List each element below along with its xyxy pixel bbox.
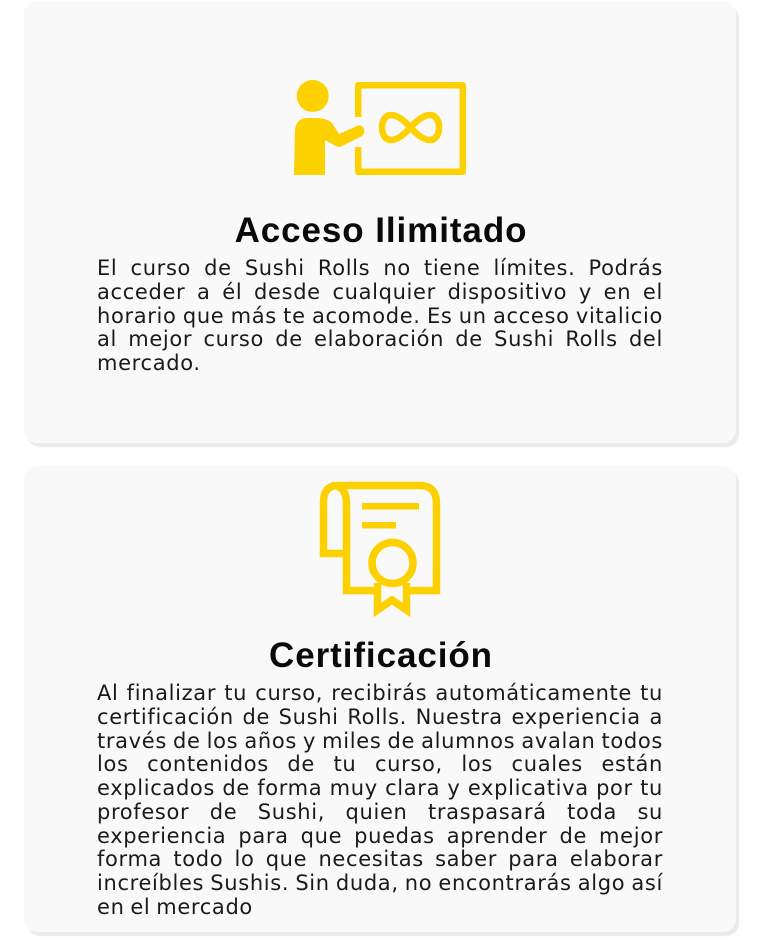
- text block: acceso ilimitado: [97, 256, 663, 375]
- text block: certificación: en el mercado: [97, 895, 253, 919]
- text block: acceso ilimitado: al mejor curso de elaboración de Sushi Rolls del: [97, 327, 663, 351]
- text block: certificación: profesor de Sushi, quien traspasará toda su: [97, 800, 663, 824]
- icon: presenter with infinity board: [294, 80, 466, 175]
- icon: certificate with ribbon: [320, 482, 440, 618]
- text block: certificación: forma todo lo que necesitas saber para elaborar: [97, 847, 663, 871]
- heading: acceso ilimitado: Acceso Ilimitado: [235, 211, 527, 250]
- heading: certificación: Certificación: [269, 636, 493, 675]
- panel: acceso ilimitado: [24, 1, 736, 443]
- text block: certificación: explicados de forma muy clara y explicativa por tu: [97, 776, 663, 800]
- text block: certificación: Al finalizar tu curso, recibirás automáticamente tu: [97, 681, 663, 705]
- text block: certificación: experiencia para que puedas aprender de mejor: [97, 824, 663, 848]
- text block: acceso ilimitado: horario que más te acomode. Es un acceso vitalicio: [97, 304, 663, 328]
- panel: certificación: [24, 466, 736, 932]
- text block: certificación: increíbles Sushis. Sin duda, no encontrarás algo así: [97, 871, 663, 895]
- text block: certificación: través de los años y miles de alumnos avalan todos: [97, 728, 663, 752]
- text block: acceso ilimitado: mercado.: [97, 351, 201, 375]
- text block: acceso ilimitado: acceder a él desde cualquier dispositivo y en el: [97, 280, 663, 304]
- text block: certificación: [97, 681, 663, 919]
- text block: acceso ilimitado: El curso de Sushi Rolls no tiene límites. Podrás: [97, 256, 663, 280]
- text block: certificación: los contenidos de tu curso, los cuales están: [97, 752, 663, 776]
- text block: certificación: certificación de Sushi Rolls. Nuestra experiencia a: [97, 705, 663, 729]
